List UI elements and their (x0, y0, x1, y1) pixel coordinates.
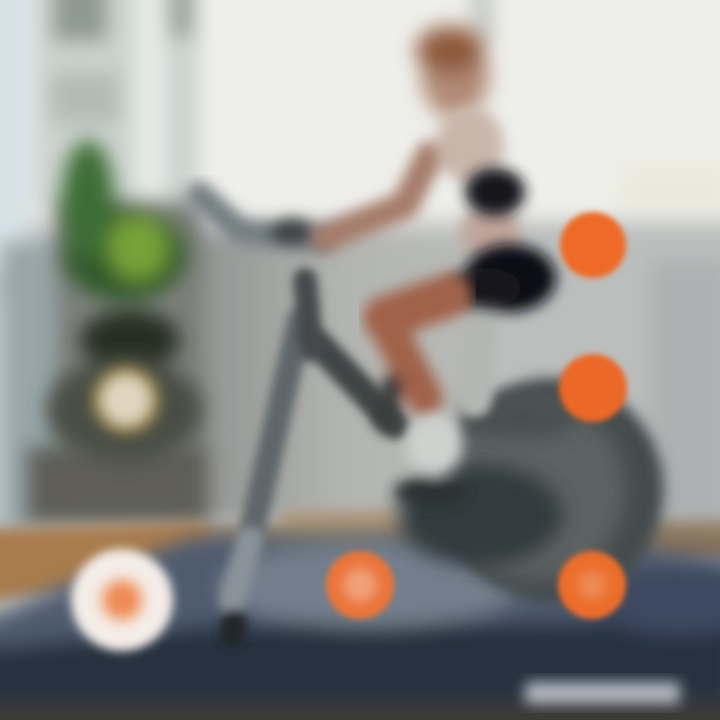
orange marker: lower right (558, 551, 626, 619)
hair and head (416, 26, 489, 119)
bike (200, 195, 664, 635)
plant (47, 140, 203, 462)
blurred logo text area (525, 682, 680, 704)
orange marker: upper right (560, 212, 626, 278)
exercise mat (0, 535, 720, 720)
black shorts (449, 244, 556, 312)
sock and shoe (394, 415, 466, 506)
black top (465, 168, 525, 216)
woman rider (325, 26, 556, 506)
orange marker: lower centre (326, 551, 394, 619)
bike handlebars (200, 195, 320, 246)
white marker with orange centre (71, 549, 173, 651)
orange marker: middle right (559, 354, 627, 422)
torso and arm (325, 107, 520, 258)
beige circular marker (92, 366, 160, 434)
bike frame (232, 280, 480, 635)
leg (385, 295, 450, 420)
bike flywheel (398, 378, 664, 602)
floor (0, 510, 720, 606)
